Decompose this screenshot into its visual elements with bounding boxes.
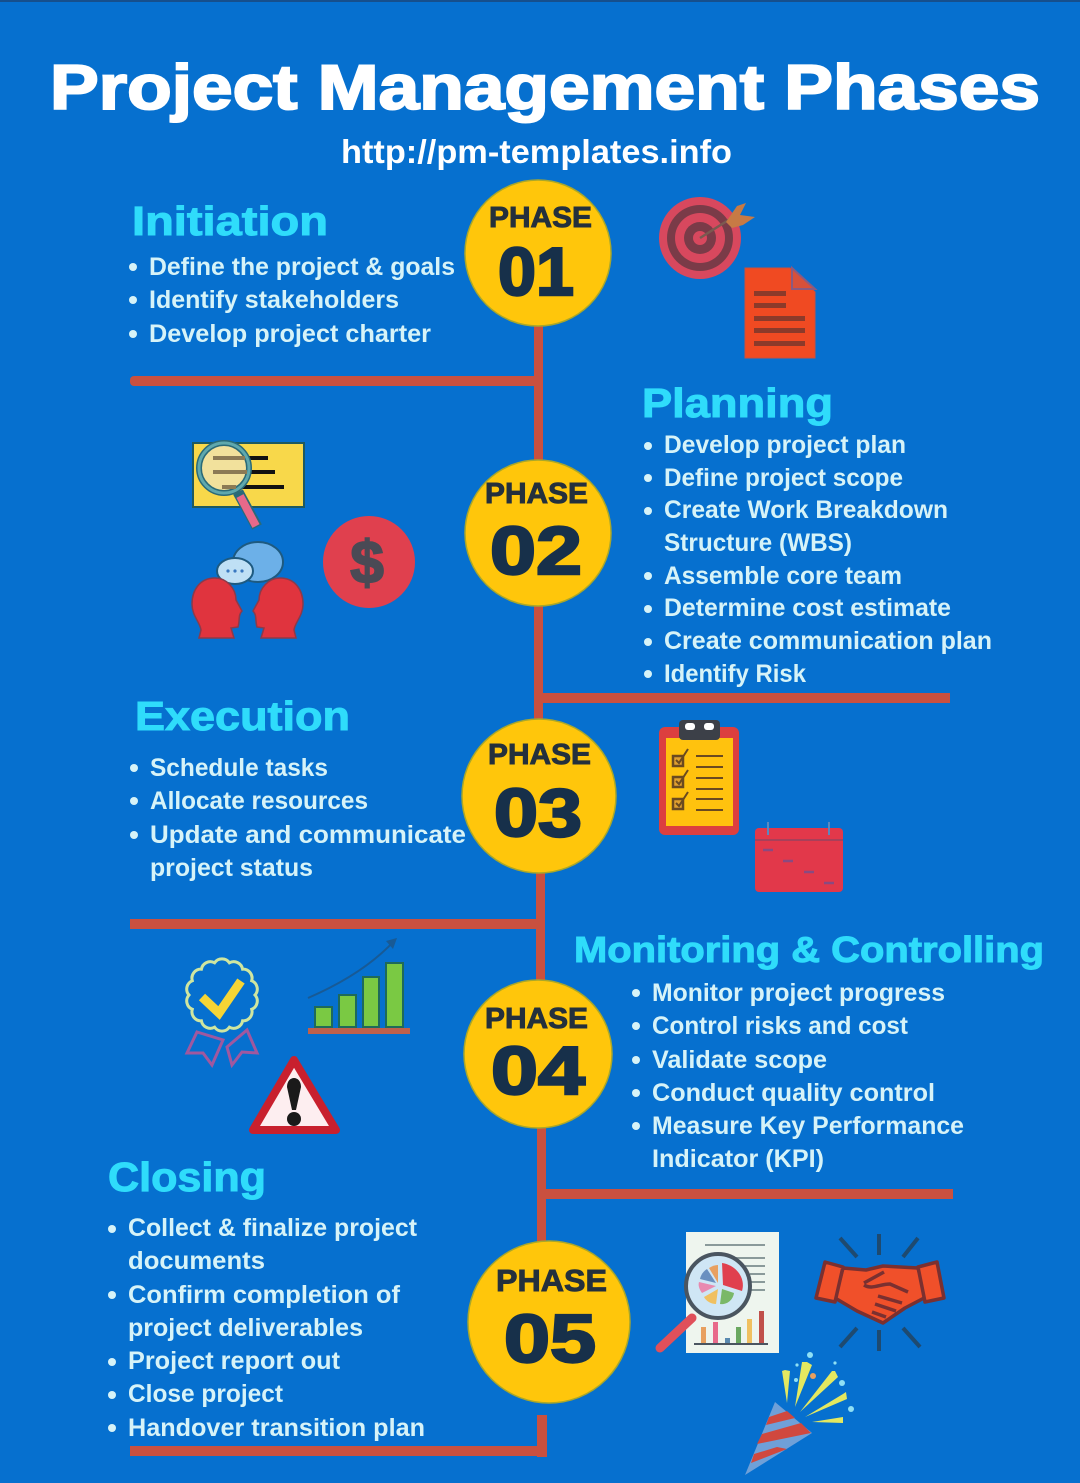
badge: phase 05: 05 bbox=[504, 1301, 596, 1377]
bullet list: closing: Confirm completion of bbox=[128, 1281, 401, 1309]
bullet list: initiation: Define the project & goals bbox=[149, 253, 455, 281]
badge: phase 03: 03 bbox=[494, 775, 582, 851]
bullet list: closing: Project report out bbox=[128, 1347, 341, 1375]
bullet list: monitoring and controlling: Control risks and cost bbox=[652, 1012, 909, 1040]
panel: initiation bbox=[129, 198, 455, 348]
icon: warning triangle bbox=[253, 1060, 336, 1130]
bullet list: monitoring and controlling bbox=[632, 979, 964, 1173]
panel: planning bbox=[642, 380, 992, 688]
icon: clipboard checklist bbox=[659, 720, 739, 835]
bullet list: monitoring and controlling: Measure Key Performance bbox=[652, 1112, 964, 1140]
bullet list: monitoring and controlling: Validate scope bbox=[652, 1046, 827, 1074]
bullet list: execution: Update and communicate bbox=[150, 821, 466, 849]
icon: party popper bbox=[745, 1352, 854, 1475]
bullet list: planning: Create Work Breakdown bbox=[664, 496, 948, 524]
bullet list: planning: Develop project plan bbox=[664, 431, 906, 459]
badge: phase 03: PHASE bbox=[488, 739, 591, 771]
bullet list: initiation: Identify stakeholders bbox=[149, 286, 399, 314]
panel: closing bbox=[108, 1154, 425, 1442]
bullet list: closing: Handover transition plan bbox=[128, 1414, 425, 1442]
icon: document bbox=[745, 268, 815, 358]
bullet list: monitoring and controlling: Indicator (KPI) bbox=[652, 1145, 824, 1173]
badge: phase 04 bbox=[464, 980, 612, 1128]
bullet list: planning: Create communication plan bbox=[664, 627, 992, 655]
bullet list: initiation bbox=[129, 253, 455, 348]
badge: phase 04: 04 bbox=[491, 1033, 585, 1109]
badge: phase 05 bbox=[468, 1241, 630, 1403]
title: Project Management Phases bbox=[50, 53, 1040, 123]
badge: phase 01: 01 bbox=[498, 234, 574, 310]
bullet list: planning: Determine cost estimate bbox=[664, 594, 951, 622]
heading: execution: Execution bbox=[135, 693, 350, 739]
bullet list: monitoring and controlling: Conduct quality control bbox=[652, 1079, 935, 1107]
bullet list: closing bbox=[108, 1214, 425, 1442]
bullet list: initiation: Develop project charter bbox=[149, 320, 431, 348]
bullet list: planning: Define project scope bbox=[664, 464, 903, 492]
icon: two heads talking bbox=[192, 542, 303, 638]
heading: planning: Planning bbox=[642, 380, 833, 426]
bullet list: execution: Schedule tasks bbox=[150, 754, 328, 782]
badge: phase 01 bbox=[465, 180, 611, 326]
icon: calendar bbox=[755, 822, 843, 892]
panel: execution bbox=[130, 693, 466, 882]
bullet list: execution: project status bbox=[150, 854, 313, 882]
website url: http://pm-templates.info bbox=[341, 133, 732, 170]
bullet list: closing: Collect & finalize project bbox=[128, 1214, 418, 1242]
bullet list: closing: project deliverables bbox=[128, 1314, 363, 1342]
icon: dollar coin: $ bbox=[350, 529, 384, 596]
badge: phase 04: PHASE bbox=[485, 1003, 588, 1035]
bullet list: execution: Allocate resources bbox=[150, 787, 368, 815]
bullet list: planning bbox=[644, 431, 992, 688]
icon: quality badge bbox=[187, 959, 257, 1065]
bullet list: execution bbox=[130, 754, 466, 882]
panel: monitoring and controlling bbox=[574, 929, 1044, 1173]
icon: handshake bbox=[816, 1234, 944, 1351]
badge: phase 02: PHASE bbox=[485, 478, 588, 510]
icon: target with arrow bbox=[659, 197, 755, 279]
bullet list: closing: Close project bbox=[128, 1380, 284, 1408]
heading: monitoring and controlling: Monitoring & Controlling bbox=[574, 929, 1044, 970]
icon: magnifier over card bbox=[193, 443, 304, 527]
badge: phase 02: 02 bbox=[490, 513, 582, 589]
icon: growth bar chart bbox=[308, 938, 410, 1034]
bullet list: closing: documents bbox=[128, 1247, 265, 1275]
bullet list: planning: Assemble core team bbox=[664, 562, 902, 590]
bullet list: planning: Identify Risk bbox=[664, 660, 806, 688]
icon: report with magnifier bbox=[660, 1232, 779, 1353]
badge: phase 01: PHASE bbox=[489, 202, 592, 234]
badge: phase 02 bbox=[465, 460, 611, 606]
icon: dollar coin bbox=[323, 516, 415, 608]
badge: phase 05: PHASE bbox=[496, 1263, 607, 1298]
badge: phase 03 bbox=[462, 719, 616, 873]
bullet list: planning: Structure (WBS) bbox=[664, 529, 852, 557]
heading: closing: Closing bbox=[108, 1154, 266, 1200]
bullet list: monitoring and controlling: Monitor project progress bbox=[652, 979, 945, 1007]
timeline connectors bbox=[130, 320, 953, 1457]
heading: initiation: Initiation bbox=[132, 198, 328, 244]
